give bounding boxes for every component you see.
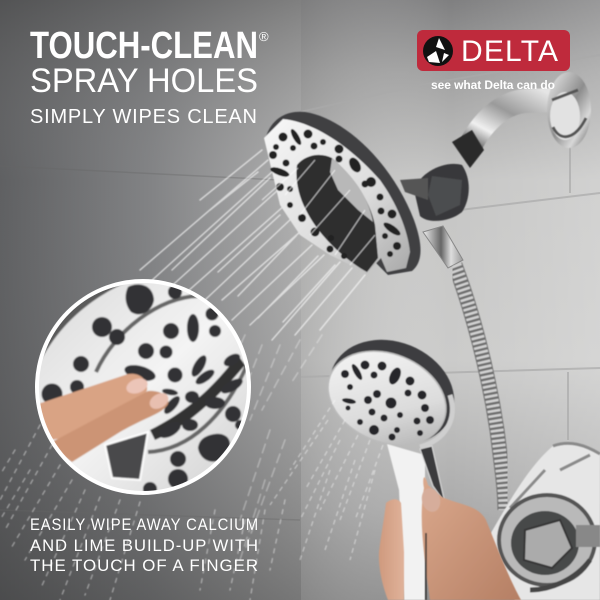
- lower finger: [52, 391, 168, 462]
- nozzle holes: [42, 284, 245, 496]
- tagline: see what Delta can do: [431, 78, 555, 92]
- handle: [387, 444, 425, 600]
- spray holes: [269, 128, 402, 259]
- fingernail lower: [149, 392, 169, 410]
- plate shading: [510, 443, 600, 508]
- hand spray: [270, 400, 383, 560]
- handle highlights: [524, 520, 572, 568]
- title: Spray Holes: SPRAY HOLES: [30, 62, 258, 100]
- caption line 1: EASILY WIPE AWAY CALCIUM: [30, 515, 259, 534]
- nozzle holes: [341, 360, 434, 440]
- shower arm and flange: [468, 72, 591, 150]
- overhead shower head: [262, 112, 421, 275]
- diverter mount: [400, 130, 484, 221]
- hand holding shower: [379, 477, 521, 600]
- head rim: [314, 322, 470, 462]
- subtitle: SIMPLY WIPES CLEAN: [30, 106, 257, 128]
- background: left dark wall: [0, 0, 301, 600]
- magnified inset: [30, 278, 256, 496]
- dark inner shadow band: [150, 355, 245, 440]
- logo badge: [417, 30, 570, 71]
- registered mark: ®: [259, 29, 269, 44]
- valve trim: [488, 443, 600, 600]
- water spray: [0, 150, 365, 600]
- hose connector: [423, 226, 463, 268]
- head face: [314, 334, 460, 462]
- bottom caption: [30, 515, 259, 575]
- reflected lower chrome: [105, 432, 148, 480]
- inset ring: [35, 279, 251, 495]
- upper finger: [38, 374, 147, 440]
- lower chrome swirl: [530, 560, 590, 590]
- hand shower: [314, 322, 470, 600]
- handle ring: [499, 495, 595, 585]
- inner ring: [96, 296, 247, 452]
- caption line 2: AND LIME BUILD-UP WITH: [30, 536, 259, 555]
- logo wordmark: DELTA: [461, 35, 558, 68]
- spray face: [264, 119, 410, 273]
- center opening: [296, 155, 378, 272]
- rim band: [43, 285, 123, 358]
- thumbnail: [419, 486, 443, 514]
- spray over face: [262, 160, 375, 265]
- logo mark: [423, 36, 453, 66]
- wall seen through opening: [330, 158, 373, 222]
- title: Touch-Clean: TOUCH-CLEAN: [30, 25, 258, 67]
- rim highlight: [420, 395, 452, 447]
- flexible hose: [455, 265, 505, 510]
- rim: [265, 112, 421, 275]
- chrome strip: [420, 446, 445, 503]
- fingernail upper: [126, 378, 148, 394]
- hose cord: [425, 533, 427, 600]
- handle knob: [576, 525, 600, 547]
- fingers: [379, 499, 404, 600]
- handle core: [511, 511, 579, 575]
- valve plate: [488, 443, 600, 600]
- Delta logo: [417, 30, 570, 92]
- palm and thumb: [422, 477, 521, 600]
- title block: [30, 25, 269, 128]
- caption line 3: THE TOUCH OF A FINGER: [30, 556, 259, 575]
- chrome face: [39, 283, 247, 491]
